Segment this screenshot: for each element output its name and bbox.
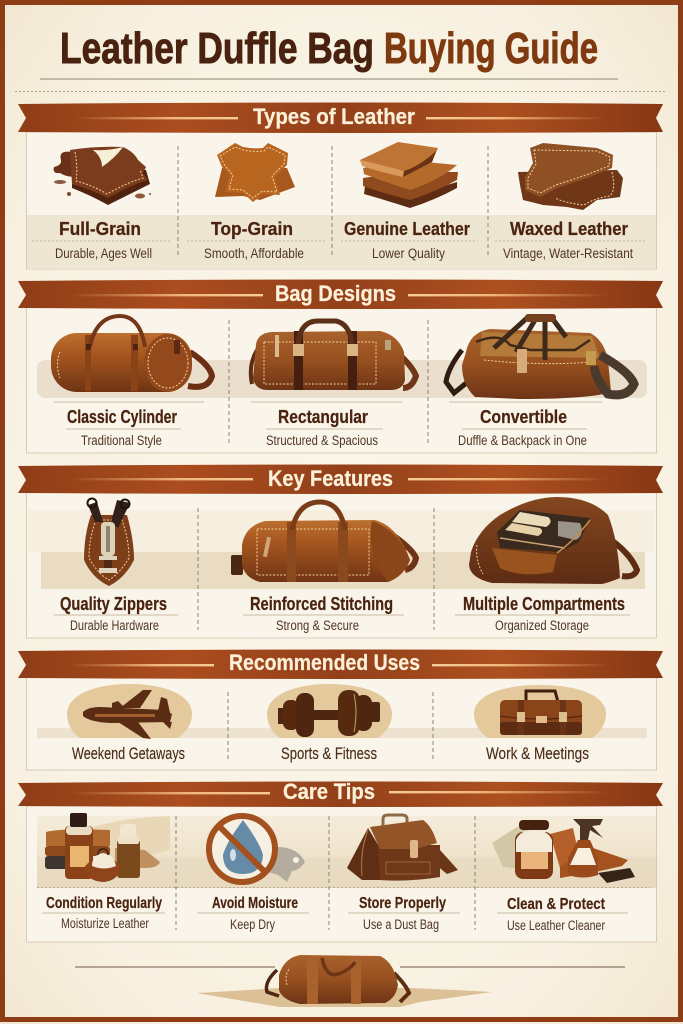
panel: bag designs xyxy=(18,280,663,453)
title: Buying Guide xyxy=(384,24,598,73)
icon: classic cylinder bag xyxy=(51,316,212,392)
banner: key features xyxy=(18,464,663,494)
labels: types of leather: Waxed Leather xyxy=(510,219,628,239)
labels: bag designs: Traditional Style xyxy=(81,433,162,448)
labels: bag designs: Classic Cylinder xyxy=(67,407,177,427)
icon: airplane xyxy=(67,684,192,739)
icon: convertible bag xyxy=(446,314,634,399)
panel: types of leather xyxy=(18,102,663,269)
labels: key features: Organized Storage xyxy=(495,618,589,633)
icon: waxed leather xyxy=(518,143,623,210)
icon: cleaning products xyxy=(492,819,635,883)
labels: recommended uses: Sports & Fitness xyxy=(281,744,377,763)
icon: avoid moisture xyxy=(209,816,305,882)
labels: care tips xyxy=(42,895,628,933)
banner: bag designs: Bag Designs xyxy=(275,281,396,306)
icon: quality zipper xyxy=(84,498,134,586)
labels: care tips: Clean & Protect xyxy=(507,896,606,913)
labels: types of leather: Vintage, Water-Resistant xyxy=(503,246,633,261)
labels: bag designs xyxy=(54,402,602,448)
labels: types of leather: Top-Grain xyxy=(211,219,293,239)
icon: rectangular bag xyxy=(251,321,416,390)
labels: recommended uses: Weekend Getaways xyxy=(72,744,185,763)
panel: key features xyxy=(18,464,663,638)
panel: recommended uses xyxy=(18,650,663,770)
labels: key features xyxy=(54,594,630,633)
labels: recommended uses xyxy=(72,744,589,763)
labels: key features: Durable Hardware xyxy=(70,618,159,633)
labels: care tips: Use a Dust Bag xyxy=(363,917,439,932)
icon: multiple compartments bag xyxy=(469,497,637,584)
icon: briefcase xyxy=(474,685,606,738)
banner: recommended uses: Recommended Uses xyxy=(229,650,420,675)
labels: types of leather: Lower Quality xyxy=(372,246,445,261)
labels: types of leather: Full-Grain xyxy=(59,219,141,239)
labels: recommended uses: Work & Meetings xyxy=(486,744,589,763)
labels: types of leather: Durable, Ages Well xyxy=(55,246,152,261)
labels: care tips: Keep Dry xyxy=(230,917,275,932)
icon: footer duffle bag xyxy=(196,955,492,1007)
labels: key features: Reinforced Stitching xyxy=(250,594,393,614)
title: Leather Duffle Bag xyxy=(60,24,374,73)
banner: recommended uses xyxy=(18,650,663,679)
icon: storage bag xyxy=(347,815,458,881)
labels: types of leather xyxy=(32,219,647,261)
labels: bag designs: Rectangular xyxy=(278,407,368,427)
icon: genuine leather stack xyxy=(360,142,458,208)
labels: types of leather: Genuine Leather xyxy=(344,219,470,239)
labels: key features: Quality Zippers xyxy=(60,594,167,614)
labels: types of leather: Smooth, Affordable xyxy=(204,246,304,261)
icon: full-grain hide xyxy=(54,147,151,205)
banner: types of leather: Types of Leather xyxy=(253,104,415,129)
labels: care tips: Condition Regularly xyxy=(46,895,162,912)
icon: conditioner bottles xyxy=(45,813,170,882)
labels: care tips: Moisturize Leather xyxy=(61,916,149,931)
banner: bag designs xyxy=(18,280,663,309)
banner: types of leather xyxy=(18,102,663,133)
labels: key features: Strong & Secure xyxy=(276,618,359,633)
labels: bag designs: Convertible xyxy=(480,407,567,427)
icon: reinforced stitching bag xyxy=(231,502,416,582)
labels: care tips: Avoid Moisture xyxy=(212,895,298,912)
banner: care tips: Care Tips xyxy=(283,779,375,804)
labels: care tips: Use Leather Cleaner xyxy=(507,918,605,933)
banner: care tips xyxy=(18,779,663,807)
labels: bag designs: Duffle & Backpack in One xyxy=(458,433,587,448)
banner: key features: Key Features xyxy=(268,466,393,491)
labels: care tips: Store Properly xyxy=(359,895,446,912)
labels: bag designs: Structured & Spacious xyxy=(266,433,378,448)
icon: top-grain hide xyxy=(215,143,295,202)
labels: key features: Multiple Compartments xyxy=(463,594,625,614)
icon: dumbbell xyxy=(267,684,392,738)
panel: care tips xyxy=(18,779,663,942)
